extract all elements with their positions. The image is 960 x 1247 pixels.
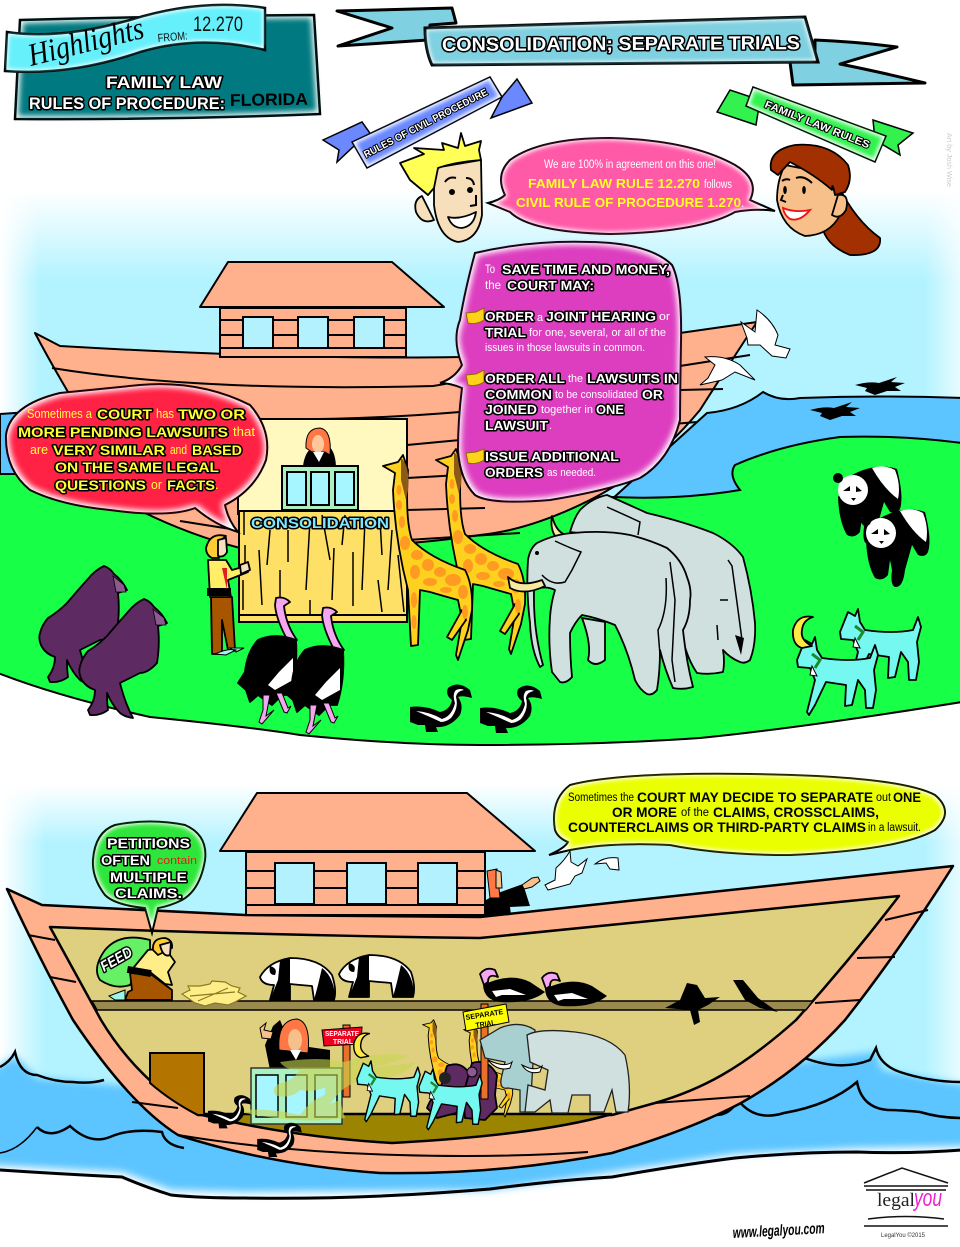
callout: magenta speech bubble: issues in those lawsuits in common. <box>485 342 645 354</box>
hay pile <box>182 981 246 1006</box>
callout: green speech bubble: MULTIPLE <box>110 869 187 885</box>
callout: red speech bubble: TWO OR <box>178 406 245 422</box>
callout: magenta speech bubble: or <box>659 311 670 323</box>
callout: red speech bubble: Sometimes a <box>27 407 92 421</box>
skunks <box>410 684 542 733</box>
logo: legalyou: you <box>913 1185 942 1212</box>
callout: magenta speech bubble: SAVE TIME AND MONEY, <box>502 262 670 277</box>
yellow separate trial sign: SEPARATE <box>465 1007 504 1022</box>
cargo door <box>150 1053 204 1115</box>
callout: pink speech bubble: CIVIL RULE OF PROCEDURE 1.270 <box>516 195 741 210</box>
callout: magenta speech bubble: COMMON <box>485 387 552 402</box>
red separate trial sign <box>322 1025 362 1097</box>
ribbon: rules of civil procedure: RULES OF CIVIL PROCEDURE <box>362 87 490 161</box>
ribbon: family law rules <box>717 87 913 162</box>
pandas on upper deck <box>260 955 414 1000</box>
lower bench <box>251 1068 342 1124</box>
callout: pink speech bubble: follows <box>704 179 732 191</box>
yellow separate trial sign <box>463 1004 509 1099</box>
callout: magenta speech bubble: together in <box>541 404 593 416</box>
callout: red speech bubble: ON THE SAME LEGAL <box>55 459 219 475</box>
callout: red speech bubble: COURT <box>97 406 152 422</box>
callout: yellow speech bubble: ONE <box>893 789 921 805</box>
ostriches <box>238 598 344 734</box>
goats <box>793 609 921 715</box>
callout: magenta speech bubble: JOINT HEARING <box>546 309 656 324</box>
callout: magenta speech bubble: as needed. <box>547 467 596 479</box>
icon: lower doves <box>545 851 619 890</box>
callout: yellow speech bubble: CLAIMS, CROSSCLAIMS, <box>713 804 879 820</box>
icon: gold ark bullet <box>466 370 484 386</box>
ark: lower hull cross-section <box>7 866 953 1173</box>
callout: magenta speech bubble <box>440 242 681 502</box>
callout: red speech bubble: or <box>151 478 162 492</box>
cyan highlights banner: FROM: <box>157 30 188 45</box>
judge <box>303 428 336 466</box>
callout: magenta speech bubble: to be consolidated <box>555 389 638 401</box>
ostriches lying on deck <box>480 969 607 1006</box>
stink gas clouds <box>240 1054 415 1120</box>
callout: magenta speech bubble: ORDERS <box>485 465 543 480</box>
officer carrying feed bag <box>97 938 175 1000</box>
website handwriting: www.legalyou.com <box>732 1220 825 1242</box>
callout: magenta speech bubble: for one, several, or all of the <box>529 327 666 339</box>
callout: green speech bubble <box>93 822 205 933</box>
character: red-haired woman <box>771 145 880 255</box>
judge at lower bench <box>260 1019 330 1070</box>
callout: red speech bubble: VERY SIMILAR <box>53 442 165 458</box>
scene: green land <box>0 437 960 745</box>
lower skunks <box>208 1095 302 1157</box>
callout: magenta speech bubble: TRIAL <box>485 325 526 340</box>
gorillas <box>39 566 167 718</box>
callout: pink speech bubble <box>488 138 775 234</box>
goats on lower deck <box>354 1033 482 1130</box>
ark cabin <box>200 262 444 357</box>
elephants <box>508 495 755 694</box>
callout: green speech bubble: CLAIMS. <box>115 885 182 901</box>
callout: magenta speech bubble: the <box>485 280 501 292</box>
callout: magenta speech bubble: ORDER <box>485 309 535 324</box>
callout: yellow speech bubble: COURT MAY DECIDE TO SEPARATE <box>637 789 873 805</box>
gorillas on lower deck <box>427 1062 497 1120</box>
scene: upper sky <box>0 190 960 520</box>
callout: red speech bubble: BASED <box>192 442 242 458</box>
judge on deck releasing dove <box>486 869 540 916</box>
ribbon: family law rules: FAMILY LAW RULES <box>763 99 871 151</box>
scene: lower sky <box>0 785 960 1125</box>
callout: red speech bubble: are <box>30 443 48 457</box>
crows on deck <box>665 980 778 1025</box>
header panel: family law highlights: RULES OF PROCEDURE: <box>29 94 225 113</box>
callout: red speech bubble: MORE PENDING LAWSUITS <box>18 424 228 440</box>
callout: magenta speech bubble: ORDER ALL <box>485 371 565 386</box>
consolidation label: CONSOLIDATION <box>251 515 389 532</box>
giraffes lower deck <box>423 1020 513 1117</box>
callout: pink speech bubble: FAMILY LAW RULE 12.270 <box>528 176 700 191</box>
bench <box>282 466 358 510</box>
callout: magenta speech bubble: LAWSUITS IN <box>587 371 678 386</box>
callout: red speech bubble: . <box>215 478 218 492</box>
callout: green speech bubble: PETITIONS <box>107 835 190 851</box>
callout: magenta speech bubble: ONE <box>596 402 624 417</box>
callout: red speech bubble: has <box>156 407 174 421</box>
callout: pink speech bubble: We are 100% in agreement on this one! <box>544 159 716 171</box>
ribbon: rules of civil procedure <box>323 77 532 168</box>
scene: lower sea and waves <box>0 1048 960 1198</box>
callout: pink speech bubble: . <box>741 198 744 210</box>
ark: lower cabin <box>220 793 535 915</box>
icon: white doves <box>700 310 790 385</box>
curtain <box>239 511 407 622</box>
panda pair <box>833 466 929 587</box>
yellow separate trial sign: TRIAL <box>475 1018 496 1030</box>
header panel: family law highlights: FAMILY LAW <box>106 73 223 92</box>
callout: red speech bubble: and <box>170 443 187 457</box>
red separate trial sign: TRIAL <box>333 1037 353 1046</box>
logo: legalyou: legal <box>877 1190 915 1211</box>
elephants on lower deck <box>480 1024 629 1113</box>
red separate trial sign: SEPARATE <box>325 1029 359 1038</box>
header panel: family law highlights: FLORIDA <box>230 90 308 110</box>
callout: magenta speech bubble: a <box>537 312 544 324</box>
callout: magenta speech bubble: ISSUE ADDITIONAL <box>485 449 619 464</box>
callout: yellow speech bubble: Sometimes the <box>568 792 634 804</box>
title banner: CONSOLIDATION; SEPARATE TRIALS <box>442 33 800 56</box>
icon: officer <box>206 535 250 655</box>
callout: yellow speech bubble: COUNTERCLAIMS OR THIRD-PARTY CLAIMS <box>568 819 866 835</box>
logo: legalyou <box>864 1168 948 1239</box>
header panel: family law highlights <box>5 5 320 119</box>
callout: yellow speech bubble: OR MORE <box>612 804 677 820</box>
callout: yellow speech bubble: of the <box>681 807 709 819</box>
callout: magenta speech bubble: JOINED <box>485 402 537 417</box>
feed bag: FEED <box>98 944 136 975</box>
callout: yellow speech bubble <box>549 774 945 855</box>
giraffes <box>383 449 525 660</box>
callout: magenta speech bubble: COURT MAY: <box>507 278 594 293</box>
cyan highlights banner: 12.270 <box>193 13 243 36</box>
callout: red speech bubble: that <box>233 425 256 439</box>
icon: crows <box>810 377 905 420</box>
vertical art credit: Art by Josh Wise <box>945 133 954 187</box>
cyan highlights banner: Highlights <box>23 9 147 73</box>
callout: green speech bubble: contain <box>157 855 197 867</box>
courtroom doorway with judge and bench <box>238 419 407 622</box>
callout: yellow speech bubble: in a lawsuit. <box>868 822 921 834</box>
callout: magenta speech bubble: the <box>568 373 583 385</box>
callout: magenta speech bubble: To <box>485 264 495 276</box>
ark deck shelf <box>92 1001 813 1010</box>
ark: upper hull and cabin <box>35 262 757 548</box>
character: blond man <box>400 133 482 242</box>
callout: red speech bubble: FACTS <box>167 477 215 493</box>
callout: magenta speech bubble: . <box>549 420 552 432</box>
logo: legalyou: LegalYou ©2015 <box>881 1232 926 1239</box>
callout: yellow speech bubble: out <box>876 792 892 804</box>
cyan highlights banner <box>5 5 265 73</box>
title banner <box>337 8 925 85</box>
callout: red speech bubble: QUESTIONS <box>55 477 146 493</box>
callout: magenta speech bubble: LAWSUIT <box>485 418 548 433</box>
icon: gold ark bullet <box>466 308 484 324</box>
icon: gold ark bullet <box>466 449 484 464</box>
callout: green speech bubble: OFTEN <box>101 852 150 868</box>
callout: red speech bubble <box>6 384 267 532</box>
callout: magenta speech bubble: OR <box>642 387 664 402</box>
